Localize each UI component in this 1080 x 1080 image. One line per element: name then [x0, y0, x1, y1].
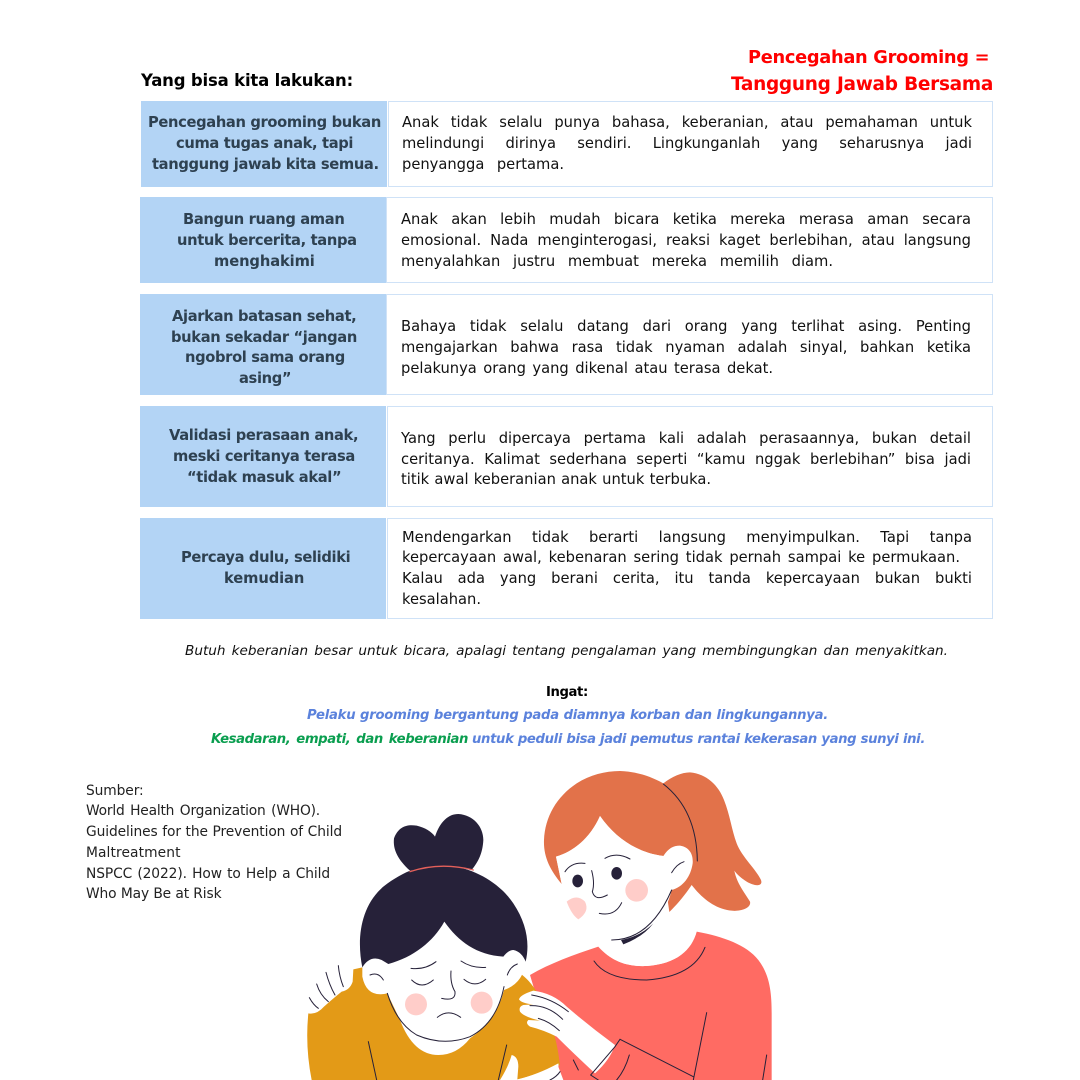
row 3 heading: Ajarkan batasan sehat,	[172, 308, 356, 325]
row 4 heading	[140, 406, 386, 507]
row 5 heading	[140, 518, 386, 619]
hair bun	[394, 814, 483, 871]
text: sources	[86, 783, 342, 902]
hand and cuff lines	[530, 995, 693, 1080]
row 3 heading: bukan sekadar “jangan	[171, 329, 357, 346]
title: shared responsibility: Tanggung Jawab Bersama	[731, 74, 993, 95]
callout: reminder: untuk peduli bisa jadi pemutus rantai kekerasan yang sunyi ini.	[472, 732, 925, 747]
row 5 text	[387, 518, 993, 619]
callout: reminder: Ingat:	[546, 685, 588, 700]
lower hand	[500, 1055, 559, 1080]
row 2 heading: menghakimi	[214, 253, 315, 270]
row 1 text: Anak tidak selalu punya bahasa, keberanian, atau pemahaman untuk	[402, 114, 972, 131]
face	[362, 922, 526, 1055]
neck	[598, 907, 697, 966]
row 3 text: mengajarkan bahwa rasa tidak nyaman adalah sinyal, bahkan ketika	[401, 339, 971, 356]
text: sources: Guidelines for the Prevention of Child	[86, 824, 342, 840]
row 4 text	[387, 406, 993, 507]
row 1 heading: Pencegahan grooming bukan	[148, 114, 381, 131]
callout: reminder: Kesadaran, empati, dan keberanian	[211, 732, 468, 747]
row 2 text: menyalahkan justru membuat mereka memilih diam.	[401, 253, 833, 270]
face	[556, 816, 693, 942]
panel: row 1	[141, 101, 993, 187]
row 2 heading: Bangun ruang aman	[183, 211, 344, 228]
row 3 text	[386, 294, 993, 395]
row 1 text	[388, 101, 993, 187]
text: sources: Sumber:	[86, 783, 144, 799]
text: italic note: Butuh keberanian besar untuk bicara, apalagi tentang pengalaman yang membingungkan dan menyakitkan.	[185, 643, 948, 659]
row 5 heading: Percaya dulu, selidiki	[181, 549, 350, 566]
row 2 text: Anak akan lebih mudah bicara ketika mereka merasa aman secara	[401, 211, 971, 228]
row 2 text: emosional. Nada menginterogasi, reaksi kaget berlebihan, atau langsung	[401, 232, 971, 249]
illustration: two girls comforting	[307, 771, 772, 1080]
hands	[309, 966, 693, 1080]
orange hair	[544, 771, 761, 912]
sad girl	[307, 814, 560, 1080]
facial lines	[565, 784, 767, 1080]
row 5 heading: kemudian	[224, 570, 304, 587]
row 4 heading: “tidak masuk akal”	[187, 469, 341, 486]
row 5 text: Mendengarkan tidak berarti langsung menyimpulkan. Tapi tanpa	[402, 529, 972, 546]
eyes	[572, 875, 583, 887]
title: shared responsibility: Pencegahan Grooming =	[748, 47, 989, 68]
row 1 text: penyangga pertama.	[402, 156, 564, 173]
row 1 heading: cuma tugas anak, tapi	[176, 135, 353, 152]
row 4 text: titik awal keberanian anak untuk terbuka.	[401, 471, 711, 488]
panel: row 3	[140, 294, 993, 395]
hand on near shoulder	[519, 991, 615, 1073]
row 2 heading	[140, 197, 386, 283]
heading: what we can do: Yang bisa kita lakukan:	[141, 71, 353, 90]
cheeks	[625, 879, 648, 902]
facial lines	[368, 961, 517, 1080]
row 1 text: melindungi dirinya sendiri. Lingkunganlah yang seharusnya jadi	[402, 135, 972, 152]
panel: row 5	[140, 518, 993, 619]
row 3 text: pelakunya orang yang dikenal atau terasa dekat.	[401, 360, 773, 377]
neck shadow	[621, 923, 653, 944]
hair band	[410, 866, 473, 872]
text: sources: World Health Organization (WHO).	[86, 803, 320, 819]
panel: row 4	[140, 406, 993, 507]
row 3 heading: asing”	[239, 370, 291, 387]
callout: reminder	[211, 685, 925, 747]
mustard shirt	[307, 967, 560, 1080]
panel: row 2	[140, 197, 993, 283]
row 3 heading	[140, 294, 386, 395]
row 4 heading: Validasi perasaan anak,	[169, 427, 358, 444]
comforting girl	[530, 771, 772, 1080]
row 3 heading: ngobrol sama orang	[185, 349, 345, 366]
row 2 heading: untuk bercerita, tanpa	[177, 232, 357, 249]
text: sources: NSPCC (2022). How to Help a Child	[86, 866, 330, 882]
row 1 heading	[141, 101, 387, 187]
title: shared responsibility	[731, 47, 993, 95]
text: sources: Maltreatment	[86, 845, 181, 861]
row 4 text: ceritanya. Kalimat sederhana seperti “kamu nggak berlebihan” bisa jadi	[401, 451, 971, 468]
row 3 text: Bahaya tidak selalu datang dari orang yang terlihat asing. Penting	[401, 318, 971, 335]
row 5 text: Kalau ada yang berani cerita, itu tanda kepercayaan bukan bukti	[402, 570, 972, 587]
row 4 heading: meski ceritanya terasa	[173, 448, 355, 465]
pink sweater	[530, 932, 772, 1080]
text: sources: Who May Be at Risk	[86, 886, 222, 902]
row 5 text: kepercayaan awal, kebenaran sering tidak pernah sampai ke permukaan.	[402, 549, 960, 566]
hand on far shoulder fingers	[309, 966, 343, 1008]
callout: reminder: Pelaku grooming bergantung pada diamnya korban dan lingkungannya.	[307, 708, 828, 723]
row 4 text: Yang perlu dipercaya pertama kali adalah perasaannya, bukan detail	[401, 430, 971, 447]
row 2 text	[386, 197, 993, 283]
dark hair	[360, 865, 527, 973]
row 1 heading: tanggung jawab kita semua.	[152, 156, 379, 173]
row 5 text: kesalahan.	[402, 591, 481, 608]
cheeks	[405, 993, 427, 1015]
